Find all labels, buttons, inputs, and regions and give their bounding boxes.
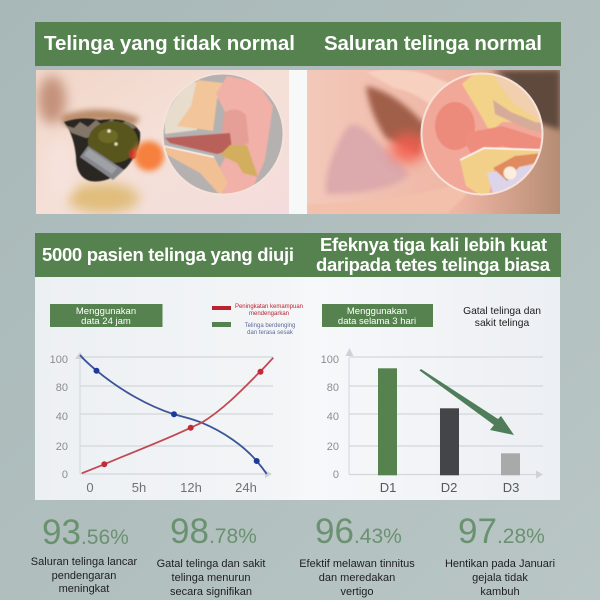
y axis labels	[321, 354, 339, 481]
stat 4: kambuh	[480, 586, 520, 598]
label: 24 hour data	[50, 304, 162, 327]
heading: abnormal ear: Telinga yang tidak normal	[44, 32, 295, 55]
arrow: downward trend	[420, 369, 514, 435]
y axis labels: 80	[327, 382, 339, 394]
bar chart title: Gatal telinga dan	[463, 306, 541, 317]
stat 4: Hentikan pada Januari	[445, 558, 555, 570]
bar chart title: sakit telinga	[475, 318, 529, 329]
blue curve	[80, 355, 267, 474]
y axis labels: 0	[333, 469, 339, 481]
ear wax	[220, 145, 258, 177]
legend	[212, 304, 303, 336]
x axis labels	[86, 480, 257, 495]
stat 1	[31, 513, 138, 595]
x axis labels: 12h	[180, 480, 202, 495]
bar chart title	[463, 306, 541, 329]
lower bone	[164, 146, 228, 195]
label: 3 day data	[322, 304, 433, 327]
y axis labels: 40	[327, 411, 339, 423]
upper bone	[177, 80, 225, 131]
stat 2: Gatal telinga dan sakit	[157, 558, 265, 570]
y axis labels: 20	[327, 441, 339, 453]
legend: Telinga berdenging	[245, 323, 295, 329]
panel: line chart	[50, 304, 303, 495]
x axis labels	[380, 480, 519, 495]
label: 24 hour data: Menggunakan	[76, 306, 136, 317]
stat 3: vertigo	[340, 586, 374, 598]
y axis labels: 40	[56, 411, 68, 423]
metal nut	[80, 146, 124, 180]
y axis labels	[50, 354, 68, 481]
label: 3 day data: data selama 3 hari	[338, 316, 416, 327]
second heading band	[35, 233, 561, 277]
x axis labels: D1	[380, 480, 396, 495]
heading: three times stronger: Efeknya tiga kali lebih kuat	[320, 234, 547, 255]
label: 3 day data: Menggunakan	[347, 306, 407, 317]
magnifier: clean ear	[420, 72, 544, 196]
legend: dan terasa sesak	[247, 330, 294, 336]
ear canal opening	[64, 118, 140, 181]
stat 2	[157, 512, 265, 598]
top heading band	[35, 22, 561, 66]
panel: charts background	[35, 277, 560, 500]
y axis labels: 100	[50, 354, 68, 366]
stat 2: telinga menurun	[172, 572, 250, 584]
photo: clean ear canal	[307, 68, 560, 214]
legend: mendengarkan	[249, 311, 289, 317]
panel: bar chart	[321, 304, 543, 495]
axes and grid	[349, 357, 543, 474]
cochlea	[164, 82, 199, 134]
stat 1: 93.56%	[42, 513, 129, 552]
lower bone	[460, 148, 539, 194]
stat 4	[445, 512, 555, 598]
outer ear	[212, 76, 273, 194]
bars	[378, 368, 520, 475]
x axis labels: D2	[441, 480, 457, 495]
heading: patients tested: 5000 pasien telinga yang diuji	[42, 244, 294, 265]
wax ball	[88, 121, 138, 163]
stat 4: gejala tidak	[472, 572, 528, 584]
heading: three times stronger: daripada tetes telinga biasa	[316, 254, 551, 275]
stat 3	[299, 512, 415, 598]
heading: normal ear: Saluran telinga normal	[324, 32, 542, 55]
canal	[466, 126, 542, 153]
stat 1: pendengaran	[52, 570, 116, 582]
y axis labels: 80	[56, 382, 68, 394]
axes and grid	[80, 357, 273, 474]
legend: Peningkatan kemampuan	[235, 304, 303, 310]
stat 2: secara signifikan	[170, 586, 252, 598]
y axis labels: 20	[56, 441, 68, 453]
x axis labels: 0	[86, 480, 94, 495]
label: 24 hour data: data 24 jam	[81, 316, 131, 327]
red curve	[82, 358, 273, 473]
x axis labels: 5h	[132, 480, 146, 495]
x axis labels: 24h	[235, 480, 257, 495]
ear canal	[165, 133, 232, 154]
swirl	[435, 102, 475, 150]
stat 3: dan meredakan	[319, 572, 395, 584]
stat 3: 96.43%	[315, 512, 402, 551]
stat 1: Saluran telinga lancar	[31, 556, 138, 568]
magnifier: blocked ear	[162, 73, 284, 195]
white divider between photos	[289, 70, 307, 214]
photo: blocked ear canal	[36, 70, 289, 214]
heading: three times stronger	[316, 234, 551, 275]
stat 2: 98.78%	[170, 512, 257, 551]
y axis labels: 100	[321, 354, 339, 366]
stat 3: Efektif melawan tinnitus	[299, 558, 415, 570]
y axis labels: 0	[62, 469, 68, 481]
stat 4: 97.28%	[458, 512, 545, 551]
stat 1: meningkat	[59, 583, 109, 595]
upper bone	[462, 74, 540, 129]
x axis labels: D3	[503, 480, 519, 495]
